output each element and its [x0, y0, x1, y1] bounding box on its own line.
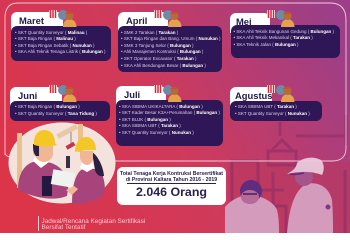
footnote: Jadwal/Rencana Kegiatan Sertifikasi [42, 218, 145, 225]
April heading: April [126, 15, 147, 26]
Juni heading [10, 87, 62, 107]
April list: • SMK 3 Tanjung Selor ( Bulungan ) [121, 43, 194, 48]
callout caption [120, 170, 223, 182]
card: Juni [10, 87, 110, 121]
Agustus list: • SKA SIBIMA UBT ( Tarakan ) [235, 104, 297, 109]
Mei list: • SKA Ahli Teknik Bangunan Gedung ( Bulungan ) [234, 29, 334, 34]
callout caption: Total Tenaga Kerja Kontruksi Bersertifikat [120, 170, 223, 176]
Agustus list: • SKT Quantity Surveyor ( Nunukan ) [235, 111, 310, 116]
Mei list: • SKA Teknik Jalan ( Bulungan ) [234, 42, 299, 47]
photo: left worker [225, 180, 279, 233]
Maret list: • SKT Baja Ringan ( Malinau ) [15, 36, 76, 41]
document [51, 169, 75, 188]
Juli list [116, 100, 223, 146]
Agustus heading [230, 87, 272, 107]
April list [118, 26, 222, 72]
Agustus heading: Agustus [235, 90, 272, 101]
Juni heading: Juni [18, 90, 37, 101]
icon: Agustus worker [267, 85, 294, 102]
Juni list [10, 101, 110, 121]
Maret heading [11, 12, 63, 32]
Juli heading [116, 86, 166, 106]
Maret list: • SKT Quantity Surveyor ( Malinau ) [15, 30, 87, 35]
icon: April worker [154, 10, 182, 27]
callout caption: di Provinsi Kaltara Tahun 2016 - 2019 [126, 176, 217, 182]
April list: • Ahli Manajemen Kontruksi ( Bulungan ) [121, 49, 203, 54]
card: April [118, 12, 222, 72]
card: Juli [116, 86, 223, 146]
Juli list: • SKT Quantity Surveyor ( Nunukan ) [119, 130, 194, 135]
Maret list: • SKT Baja Ringan Sebatik ( Nunukan ) [15, 43, 95, 48]
Juli list: • SKA SIBIMA UBT ( Tarakan ) [119, 123, 181, 128]
April list: • SKT Baja Ringan dan Bang. Umum ( Nunukan ) [121, 36, 221, 41]
Mei heading: Mei [236, 16, 252, 27]
Mei list [231, 25, 340, 58]
Juni list: • SKT Baja Ringan ( Bulungan ) [15, 104, 80, 109]
callout number: 2.046 Orang [136, 185, 207, 199]
icon: Juni worker [49, 85, 76, 102]
callout: total certified workers [117, 167, 226, 205]
Maret list: • SKA Ahli Teknik Tenaga Listrik ( Bulungan ) [15, 49, 105, 54]
April list: • SKT Operator Excavator ( Tarakan ) [121, 56, 196, 61]
card: Mei [230, 13, 340, 58]
left worker [18, 162, 69, 199]
Juli heading: Juli [124, 89, 140, 100]
Mei heading [230, 13, 270, 33]
Juni list: • SKT Quantity Surveyor ( Tana Tidung ) [15, 111, 97, 116]
Mei list: • SKA Ahli Teknik Mekanikal ( Tarakan ) [234, 35, 313, 40]
icon: Mei worker [267, 10, 294, 27]
photo: right worker [287, 158, 333, 233]
April heading [118, 12, 168, 32]
card: Agustus [230, 87, 322, 121]
footnote [38, 216, 145, 231]
April list: • SMK 2 Tarakan ( Tarakan ) [121, 30, 178, 35]
icon: Juli worker [154, 85, 182, 102]
Maret list [11, 26, 111, 61]
footnote: Bersifat Tentatif [42, 224, 85, 231]
callout number [127, 183, 216, 201]
card: Maret [11, 12, 111, 61]
right worker [72, 168, 105, 204]
Maret heading: Maret [19, 15, 44, 26]
April list: • SKA Ahli Bendungan Besar ( Bulungan ) [121, 63, 206, 68]
icon: Maret worker [49, 10, 76, 27]
Juli list: • SKT Kader Besar K3A+Perumahan ( Bulungan ) [119, 110, 220, 115]
Juli list: • SKT BUJK ( Bulungan ) [119, 117, 171, 122]
Juli list: • SKA SIBIMA UKIKALTARA ( Bulungan ) [119, 104, 203, 109]
Agustus list [230, 101, 322, 121]
